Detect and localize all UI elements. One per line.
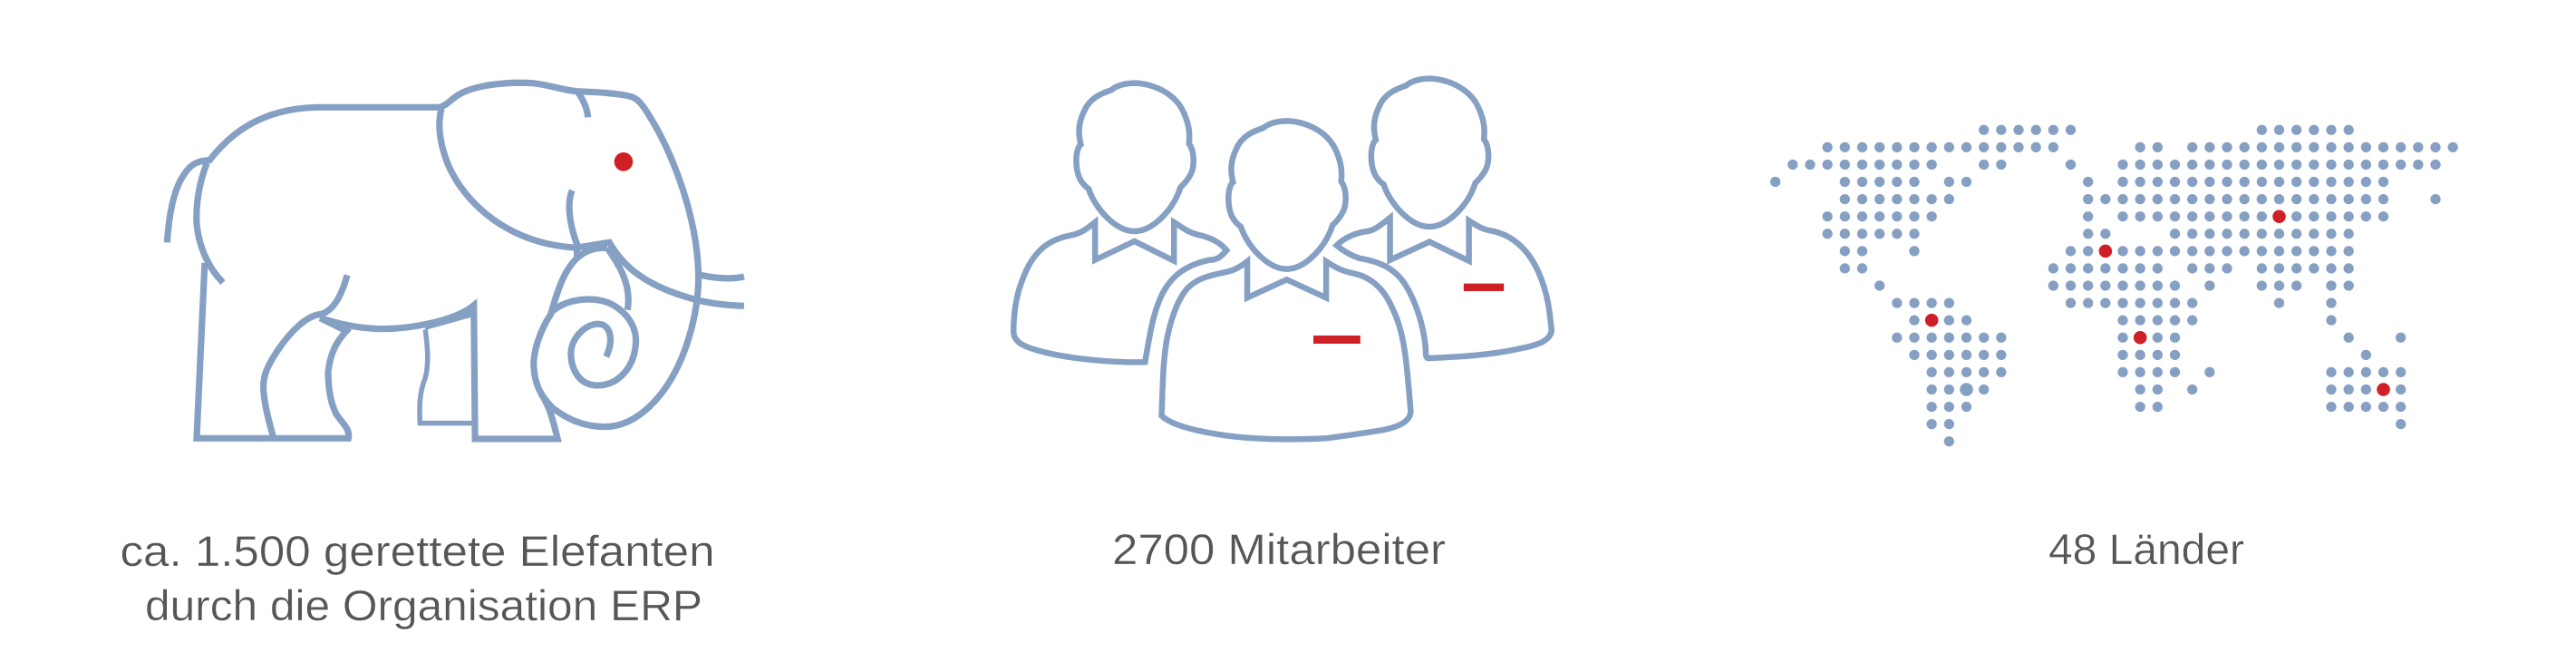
red location markers	[1925, 209, 2390, 396]
caption: elephants: ca. 1.500 gerettete Elefanten	[120, 527, 714, 575]
elephant outline: tail, back, head and trunk	[167, 83, 699, 427]
caption: elephants	[120, 527, 714, 629]
caption: employees: 2700 Mitarbeiter	[1112, 525, 1446, 573]
elephant front leg and belly	[320, 306, 557, 439]
icon: dotted world map	[1776, 130, 2453, 442]
icon: three employees	[1013, 79, 1552, 439]
elephant hind legs	[197, 263, 349, 438]
centre person	[1162, 121, 1410, 439]
icon: elephant	[167, 83, 744, 439]
map dots	[1776, 130, 2453, 442]
left person	[1013, 83, 1226, 362]
elephant rump	[197, 163, 223, 283]
elephant mouth and tusks	[569, 190, 744, 306]
elephant trunk spiral	[551, 248, 636, 385]
enlarged map dot	[1960, 383, 1973, 396]
elephant belly corner wedge	[425, 304, 475, 330]
elephant ear	[440, 91, 588, 248]
caption: countries: 48 Länder	[2048, 525, 2244, 573]
elephant eye	[615, 152, 633, 171]
right person	[1337, 79, 1552, 358]
caption: elephants: durch die Organisation ERP	[145, 581, 702, 629]
elephant far front leg	[420, 329, 474, 424]
